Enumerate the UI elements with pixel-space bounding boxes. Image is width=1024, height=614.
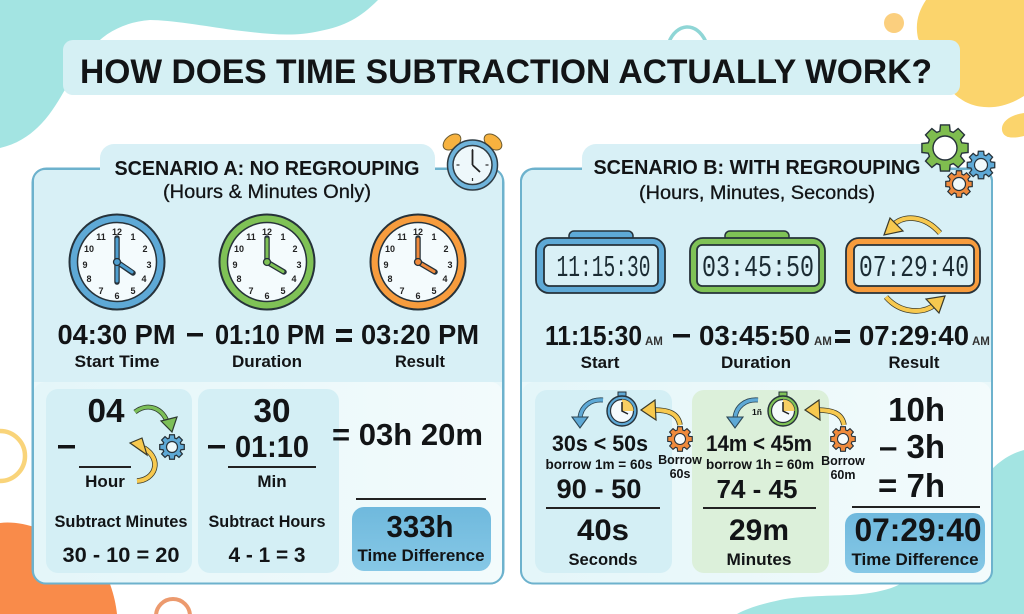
icon: gears — [922, 125, 995, 197]
clock: start time: 7 — [98, 286, 104, 296]
clock: duration: 12 — [262, 227, 272, 237]
scenario A heading: SCENARIO A: NO REGROUPING — [114, 158, 420, 180]
scenario B heading — [594, 157, 920, 204]
equation: scenario A times: 03:20 PM — [361, 319, 479, 350]
clock: duration: 9 — [232, 260, 238, 270]
clock: duration: 2 — [292, 244, 298, 254]
card: seconds: 90 - 50 — [556, 474, 642, 504]
clock: duration: 8 — [236, 274, 242, 284]
clock: result: 8 — [387, 274, 393, 284]
clock: duration: 10 — [234, 244, 244, 254]
borrow 60m: gear, arrow and label — [805, 400, 865, 482]
card: subtract hours: 4 - 1 = 3 — [228, 544, 306, 567]
scenario B heading: (Hours, Minutes, Seconds) — [639, 183, 875, 204]
card: minutes — [692, 390, 829, 573]
arrow: blue seconds — [572, 400, 603, 428]
box: time difference B: Time Difference — [852, 550, 978, 569]
clock: start time: 2 — [142, 244, 148, 254]
box: time difference A — [352, 507, 491, 571]
equation: scenario B times: Result — [888, 353, 940, 372]
card: seconds: 30s < 50s — [552, 431, 648, 456]
clock: duration: 3 — [296, 260, 302, 270]
equation: scenario B times: AM — [645, 336, 663, 348]
equation: scenario B times: Duration — [721, 353, 791, 372]
scenario A heading — [114, 158, 420, 203]
card: subtract hours: Min — [257, 472, 287, 491]
clock: result: 7 — [399, 286, 405, 296]
clock: duration: 7 — [248, 286, 254, 296]
title banner — [63, 40, 960, 95]
card: seconds: borrow 1m = 60s — [546, 456, 653, 472]
digital clock: result: 07:29:40 — [859, 251, 969, 286]
clock: result: 9 — [383, 260, 389, 270]
digital clock: duration — [690, 231, 825, 293]
arrow: yellow — [130, 438, 155, 481]
box: time difference B: 07:29:40 — [854, 512, 982, 548]
clock: duration: 1 — [280, 232, 286, 242]
background pill: yellow — [1002, 113, 1024, 138]
arrow: yellow bottom — [886, 296, 945, 313]
card: minutes: 74 - 45 — [716, 474, 798, 504]
background dot: yellow — [884, 13, 904, 33]
borrow 60s: gear, arrow and label: 60s — [670, 467, 690, 481]
hours calculation: 10h — [888, 391, 945, 428]
equation: scenario A times: Start Time — [74, 352, 160, 371]
background blob: top right yellow — [917, 0, 1024, 107]
arrow: yellow top — [884, 218, 940, 235]
clock: result: 4 — [442, 274, 448, 284]
digital clock: start: 11:15:30 — [556, 251, 650, 286]
clock: duration: 4 — [291, 274, 297, 284]
clock: result: 11 — [397, 232, 407, 242]
equation: scenario B times: AM — [972, 336, 990, 348]
card: subtract minutes: Subtract Minutes — [54, 512, 188, 531]
card: subtract minutes: Hour — [85, 472, 125, 491]
clock: start time: 9 — [82, 260, 88, 270]
equation: scenario A times: Duration — [232, 352, 302, 371]
panel: scenario B — [521, 125, 995, 584]
clock: start time: 8 — [86, 274, 92, 284]
hours calculation: – 3h — [879, 428, 945, 465]
card: minutes: borrow 1h = 60m — [706, 456, 814, 472]
digital clock: start — [536, 231, 665, 293]
panel: scenario A — [32, 131, 505, 584]
clock: result: 3 — [447, 260, 453, 270]
digital clock: result — [846, 238, 980, 293]
digital clock: duration: 03:45:50 — [702, 251, 814, 286]
background ring: yellow — [0, 431, 25, 481]
icon: alarm clock — [440, 131, 505, 190]
clock: start time: 6 — [114, 291, 120, 301]
borrow 60s: gear, arrow and label — [641, 400, 702, 481]
clock: start time: 10 — [84, 244, 94, 254]
background arc: teal — [669, 27, 706, 42]
clock: duration — [220, 214, 314, 310]
icon: blue gear — [160, 435, 184, 459]
equation: scenario A times: Result — [395, 352, 445, 371]
scenario B heading: SCENARIO B: WITH REGROUPING — [594, 157, 920, 179]
card: seconds: Seconds — [568, 550, 638, 569]
box: time difference B — [845, 512, 985, 573]
card: subtract hours: 01:10 — [235, 429, 309, 464]
arrow: green — [135, 407, 177, 432]
background blob: top left teal — [0, 0, 378, 148]
equation: scenario A times — [58, 319, 479, 371]
equation: scenario B times — [545, 320, 990, 372]
background blob: bottom left orange — [0, 523, 117, 614]
clock: start time: 3 — [146, 260, 152, 270]
card: subtract hours — [198, 389, 339, 573]
card: seconds — [535, 390, 672, 573]
clock: start time: 5 — [130, 286, 136, 296]
clock: result: 5 — [431, 286, 437, 296]
clock: duration: 6 — [264, 291, 270, 301]
card: seconds: 40s — [577, 514, 629, 547]
card: subtract hours: 30 — [254, 392, 290, 429]
clock: start time: 1 — [130, 232, 136, 242]
result: 03h 20m: = 03h 20m — [332, 417, 483, 452]
box: time difference A: Time Difference — [358, 546, 484, 565]
borrow 60s: gear, arrow and label: Borrow — [658, 453, 702, 467]
arrow: blue minutes — [727, 400, 758, 428]
icon: stopwatch green — [768, 392, 798, 426]
clock: duration: 5 — [280, 286, 286, 296]
equation: scenario A times: 01:10 PM — [215, 319, 325, 350]
clock: start time — [70, 214, 164, 310]
card: subtract minutes — [46, 389, 192, 573]
equation: scenario A times: 04:30 PM — [58, 319, 176, 350]
equation: scenario B times: 11:15:30 — [545, 320, 642, 351]
card: minutes: 29m — [729, 514, 789, 547]
card: subtract minutes: 30 - 10 = 20 — [62, 544, 180, 567]
hours calculation: = 7h — [878, 467, 945, 504]
box: time difference A: 333h — [386, 509, 454, 544]
background blob: bottom right teal — [737, 450, 1024, 614]
background ring: orange — [156, 599, 190, 614]
borrow 60m: gear, arrow and label: 60m — [830, 468, 856, 482]
clock: result — [370, 214, 466, 310]
card: subtract hours: Subtract Hours — [208, 512, 326, 531]
clock: duration: 11 — [246, 232, 256, 242]
title: HOW DOES TIME SUBTRACTION ACTUALLY WORK? — [80, 53, 932, 91]
hours calculation — [852, 391, 980, 508]
clock: start time: 11 — [96, 232, 106, 242]
equation: scenario B times: 03:45:50 — [699, 320, 810, 351]
clock: result: 12 — [413, 227, 423, 237]
card: minutes: Minutes — [726, 550, 792, 569]
clock: result: 2 — [443, 244, 449, 254]
equation: scenario B times: 07:29:40 — [859, 320, 969, 351]
card: minutes: 1ñ — [752, 407, 762, 417]
scenario A heading: (Hours & Minutes Only) — [163, 182, 371, 203]
card: minutes: 14m < 45m — [706, 431, 812, 456]
clock: result: 10 — [385, 244, 395, 254]
clock: start time: 4 — [141, 274, 147, 284]
icon: stopwatch blue — [607, 392, 637, 426]
equation: scenario B times: Start — [581, 353, 620, 372]
clock: result: 1 — [431, 232, 437, 242]
clock: start time: 12 — [112, 227, 122, 237]
equation: scenario B times: AM — [814, 336, 832, 348]
clock: result: 6 — [415, 291, 421, 301]
card: subtract minutes: 04 — [88, 392, 125, 429]
borrow 60m: gear, arrow and label: Borrow — [821, 454, 865, 468]
